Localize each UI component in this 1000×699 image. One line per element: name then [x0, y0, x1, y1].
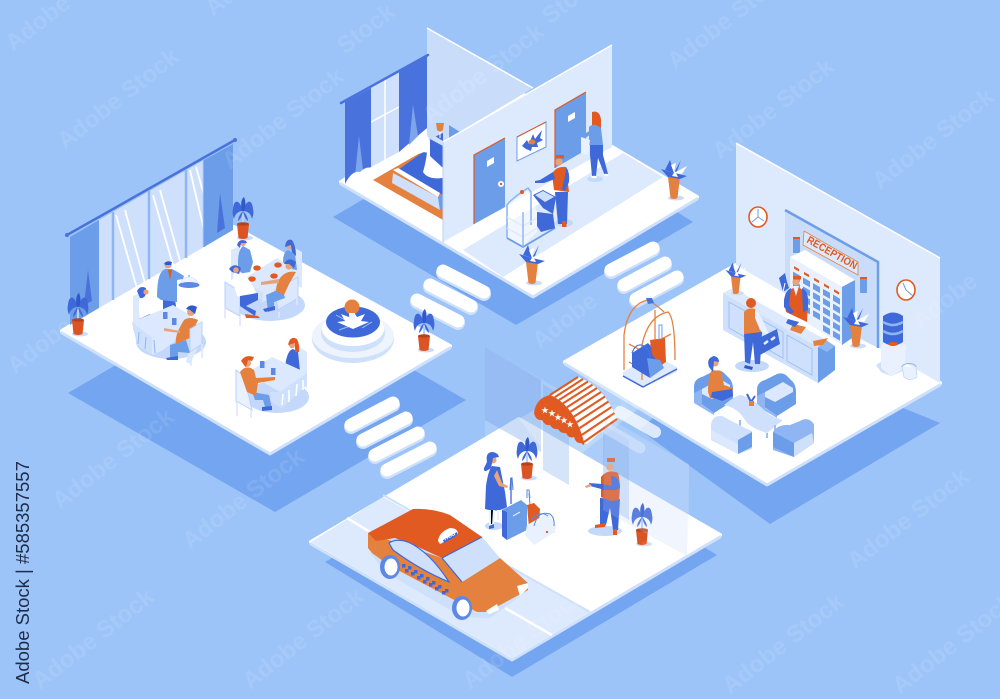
steps: restaurant to taxi — [351, 403, 430, 472]
corridor floor — [463, 153, 663, 277]
panel: restaurant — [62, 138, 450, 454]
restaurant floor — [62, 227, 450, 452]
plant — [233, 197, 253, 240]
receptionist — [784, 276, 808, 322]
woman in blue — [285, 338, 307, 388]
stock image watermark: Stock — [337, 333, 406, 395]
stock image watermark: Adobe Stock — [717, 588, 850, 699]
window and curtains — [341, 55, 428, 186]
stock image credit: Adobe Stock | #585357557 — [12, 461, 33, 684]
awning: ★ — [554, 413, 562, 422]
clock — [897, 280, 915, 300]
stock image watermark: Adobe Stock — [457, 583, 590, 695]
cloche — [178, 275, 200, 288]
near diner in orange — [261, 259, 298, 318]
reception floor — [565, 265, 940, 483]
table — [242, 258, 298, 302]
plant — [517, 437, 537, 480]
taxi roof sign — [438, 528, 458, 544]
steps: rooms to reception — [611, 248, 677, 301]
table — [132, 305, 190, 355]
plant — [519, 245, 545, 286]
road — [311, 497, 590, 658]
stock image watermark: Adobe Stock — [417, 18, 550, 130]
reception sign: RECEPTION — [805, 234, 859, 272]
awning: ★ — [541, 406, 549, 415]
armchair — [711, 416, 752, 454]
plant — [414, 309, 434, 352]
plant — [68, 293, 88, 336]
back chair and diner — [231, 240, 253, 280]
stock image watermark: Adobe — [907, 267, 983, 335]
awning — [534, 377, 617, 445]
entrance floor — [311, 419, 720, 658]
bellboy — [535, 155, 573, 227]
plant — [632, 503, 652, 546]
window wall with curtains — [65, 138, 237, 325]
desk plant — [725, 263, 746, 295]
steps: restaurant to rooms — [417, 271, 484, 323]
awning: ★ — [560, 416, 568, 425]
stock image watermark: Adobe Stock — [177, 443, 310, 555]
stock image watermark: Adobe Stock — [217, 63, 350, 175]
stock image watermark: Adobe Stock — [27, 583, 160, 695]
panel: hotel rooms — [341, 28, 697, 297]
plant — [843, 308, 869, 348]
table with four diners — [225, 240, 305, 326]
chair and woman in white — [133, 287, 156, 331]
reception backboard — [785, 210, 878, 348]
panel: reception — [565, 143, 940, 485]
stock image watermark: Adobe Stock — [707, 53, 840, 165]
plant behind desk — [779, 273, 789, 292]
table with couple — [236, 338, 309, 418]
stock image watermark: Stock — [332, 0, 401, 60]
reception desk — [723, 288, 835, 383]
waiter — [157, 261, 184, 312]
far diner — [283, 240, 302, 288]
man in orange — [164, 305, 199, 364]
armchair — [773, 419, 814, 457]
panel: taxi entrance — [311, 347, 720, 660]
front glass panel — [603, 421, 689, 556]
clock — [749, 207, 767, 227]
luggage — [502, 478, 556, 545]
stock image watermark: Adobe Stock — [52, 43, 185, 155]
back wall — [427, 28, 533, 170]
rooms floor — [341, 84, 697, 295]
door — [474, 138, 505, 224]
stock image watermark: Adobe Stock — [867, 83, 1000, 195]
front wall — [443, 45, 612, 242]
stock image watermark: Adobe — [527, 287, 603, 355]
nightstand and wine glass — [430, 123, 460, 168]
table — [247, 357, 307, 408]
wall picture — [517, 122, 546, 161]
taxi roof sign: TAXI — [442, 531, 457, 543]
stock image watermark: Stock — [597, 533, 666, 595]
woman with luggage — [484, 452, 508, 530]
awning: ★ — [566, 420, 574, 429]
table with waiter — [132, 261, 206, 366]
chair — [190, 322, 202, 366]
water cooler — [876, 312, 917, 380]
taxi — [368, 509, 529, 620]
key shelves — [790, 250, 855, 345]
stock image watermark: Adobe Stock — [47, 403, 180, 515]
translucent steps behind glass — [604, 412, 655, 448]
plant — [661, 160, 687, 200]
luggage cart — [623, 298, 677, 387]
stock image watermark: Adobe Stock — [842, 463, 975, 575]
armchair — [757, 373, 796, 418]
doorman — [585, 458, 622, 536]
awning: ★ — [548, 409, 556, 418]
bed on rug — [373, 139, 443, 220]
stock image watermark: Stock — [602, 368, 671, 430]
stock image watermark: Adobe — [2, 312, 78, 380]
door — [555, 92, 586, 168]
service cart — [507, 188, 556, 247]
man in orange — [236, 356, 275, 418]
armchair with seated woman — [694, 356, 733, 415]
woman at door — [581, 112, 608, 182]
guest with suitcase — [735, 298, 780, 372]
back glass lobby — [485, 347, 689, 556]
near diner in white — [225, 265, 260, 326]
panel shadows under platforms — [68, 110, 940, 677]
coffee table — [724, 394, 783, 438]
stock image watermark: Adobe Stock — [237, 583, 370, 695]
reception wall — [736, 143, 940, 383]
fountain — [312, 300, 394, 363]
